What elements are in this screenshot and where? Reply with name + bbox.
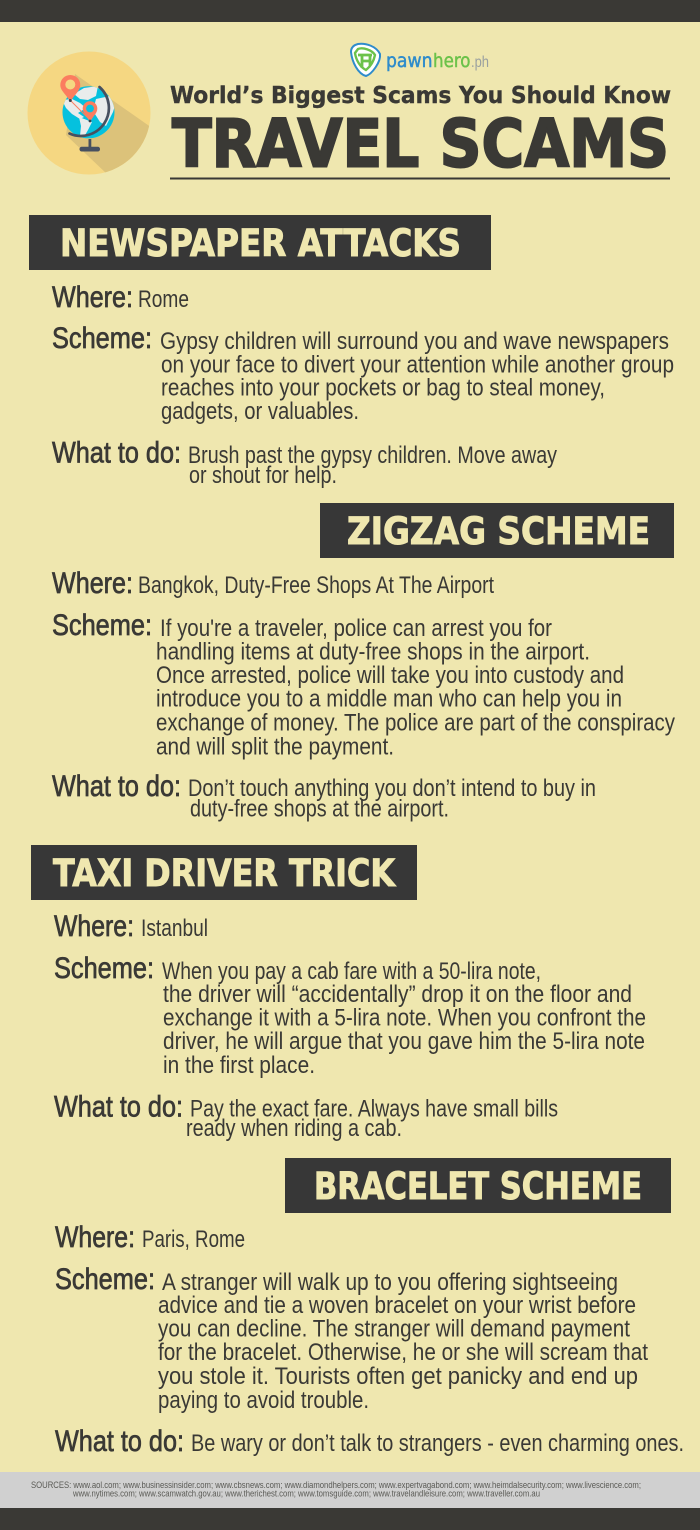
logo: pawnhero.ph: .ph (471, 54, 489, 71)
scheme: handling items at duty-free shops in the airport. (156, 638, 590, 666)
scheme: you can decline. The stranger will demand payment (158, 1316, 630, 1342)
scheme: Scheme: (52, 322, 152, 355)
sources footer (0, 1472, 700, 1508)
what to do: or shout for help. (189, 462, 337, 489)
logo: pawnhero.ph: pawn (386, 50, 432, 72)
panel: taxi driver trick (31, 845, 646, 1142)
scheme: advice and tie a woven bracelet on your wrist before (158, 1292, 636, 1319)
where (54, 910, 208, 943)
sources footer: www.nytimes.com; www.scamwatch.gov.au; www.therichest.com; www.tomsguide.com; www.travelandleisure.com; www.traveller.com.au (72, 1488, 540, 1500)
what to do (52, 770, 596, 822)
where: Where: (52, 567, 133, 600)
what to do: Don’t touch anything you don’t intend to buy in (188, 775, 596, 802)
scheme: If you're a traveler, police can arrest you for (160, 615, 552, 642)
what to do: What to do: (52, 436, 181, 470)
scheme: Scheme: (55, 1263, 155, 1296)
scheme: paying to avoid trouble. (158, 1387, 369, 1414)
scheme: Scheme: (52, 609, 152, 642)
logo: pawnhero.ph (351, 44, 489, 76)
where: Paris, Rome (142, 1226, 245, 1253)
scheme: When you pay a cab fare with a 50-lira note, (162, 958, 541, 985)
what to do (54, 1090, 558, 1142)
header (28, 44, 671, 195)
scheme: in the first place. (163, 1052, 315, 1079)
scheme: you stole it. Tourists often get panicky and end up (158, 1363, 638, 1390)
scheme (54, 952, 646, 1079)
what to do: Brush past the gypsy children. Move away (188, 442, 557, 469)
where: Istanbul (141, 915, 208, 942)
panel: bracelet scheme (55, 1158, 684, 1458)
heading: bracelet scheme (285, 1158, 671, 1213)
scheme: A stranger will walk up to you offering sightseeing (162, 1269, 618, 1296)
where: Where: (54, 910, 134, 943)
what to do (55, 1425, 684, 1458)
what to do: What to do: (52, 770, 181, 803)
scheme: introduce you to a middle man who can help you in (156, 686, 622, 712)
heading: taxi driver trick (31, 845, 417, 900)
heading: newspaper attacks: NEWSPAPER ATTACKS (60, 221, 461, 265)
scheme (52, 322, 674, 425)
heading: zigzag scheme: ZIGZAG SCHEME (347, 509, 650, 553)
scheme: the driver will “accidentally” drop it on the floor and (163, 981, 632, 1008)
stand of the globe (70, 87, 109, 136)
what to do: ready when riding a cab. (186, 1115, 402, 1142)
where (52, 567, 494, 600)
what to do: Pay the exact fare. Always have small bills (190, 1096, 558, 1122)
panel: zigzag scheme (52, 503, 675, 822)
what to do: What to do: (54, 1090, 183, 1124)
heading: taxi driver trick: TAXI DRIVER TRICK (53, 851, 397, 895)
what to do: What to do: (55, 1425, 184, 1458)
scheme: gadgets, or valuables. (161, 398, 359, 425)
where (55, 1221, 245, 1254)
what to do (52, 436, 557, 489)
where: Bangkok, Duty-Free Shops At The Airport (138, 572, 494, 599)
where: Rome (138, 286, 189, 313)
where: Where: (55, 1221, 135, 1254)
scheme: reaches into your pockets or bag to steal money, (161, 374, 605, 402)
scheme: Once arrested, police will take you into custody and (156, 662, 624, 689)
subtitle: World’s Biggest Scams You Should Know (170, 81, 671, 109)
scheme (52, 609, 675, 760)
scheme: and will split the payment. (156, 734, 394, 760)
scheme (55, 1263, 648, 1414)
what to do: duty-free shops at the airport. (190, 796, 449, 822)
icon: globe with map pins (28, 52, 150, 174)
scheme: Scheme: (54, 952, 154, 985)
logo: pawnhero.ph: hero (433, 50, 470, 72)
panel: newspaper attacks (29, 215, 674, 489)
where: Where: (52, 281, 133, 314)
